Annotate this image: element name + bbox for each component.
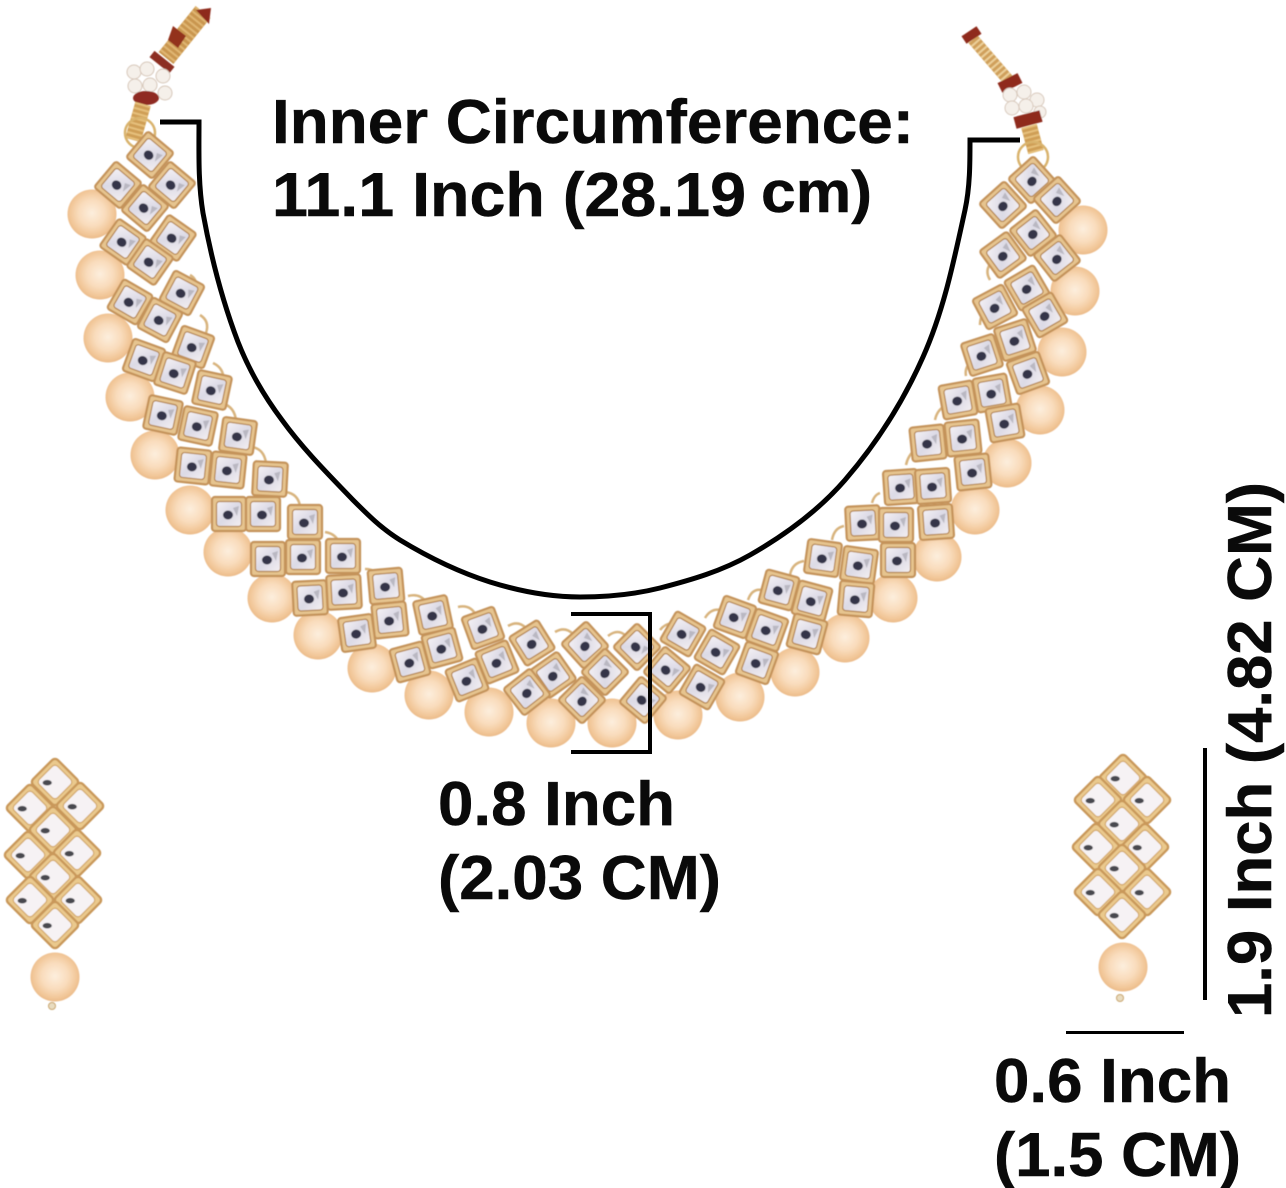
- kundan stones: right arm: [660, 156, 1081, 710]
- left cord with beads and tassel: [125, 8, 211, 148]
- title: inner circumference: [272, 88, 914, 230]
- earring height line: [1203, 748, 1207, 1000]
- necklace width bracket: [571, 614, 650, 752]
- right earring: [1071, 753, 1172, 1002]
- label: earring width: (1.5 CM): [994, 1121, 1241, 1188]
- title: inner circumference: Inner Circumference:: [272, 88, 914, 157]
- label: necklace width: [438, 770, 721, 913]
- kundan stones: left arm: [94, 131, 362, 616]
- label: necklace width: (2.03 CM): [438, 844, 721, 913]
- label: earring height: 1.9 Inch (4.82 CM): [1216, 482, 1285, 1018]
- kundan stones: centre: [338, 568, 691, 724]
- necklace: [68, 8, 1108, 748]
- title: inner circumference: cm): [761, 160, 872, 225]
- label: earring width: 0.6 Inch: [994, 1047, 1231, 1116]
- right cord with beads and tassel: [964, 30, 1048, 172]
- earring width line: [1066, 1031, 1184, 1034]
- label: necklace width: 0.8 Inch: [438, 770, 675, 839]
- label: earring width: [994, 1047, 1241, 1188]
- inner circumference measuring line: [160, 122, 1020, 597]
- title: inner circumference: 11.1 Inch (28.19: [272, 161, 746, 230]
- connector links: [175, 220, 992, 636]
- pearls: [68, 190, 1108, 748]
- left earring: [3, 757, 105, 1010]
